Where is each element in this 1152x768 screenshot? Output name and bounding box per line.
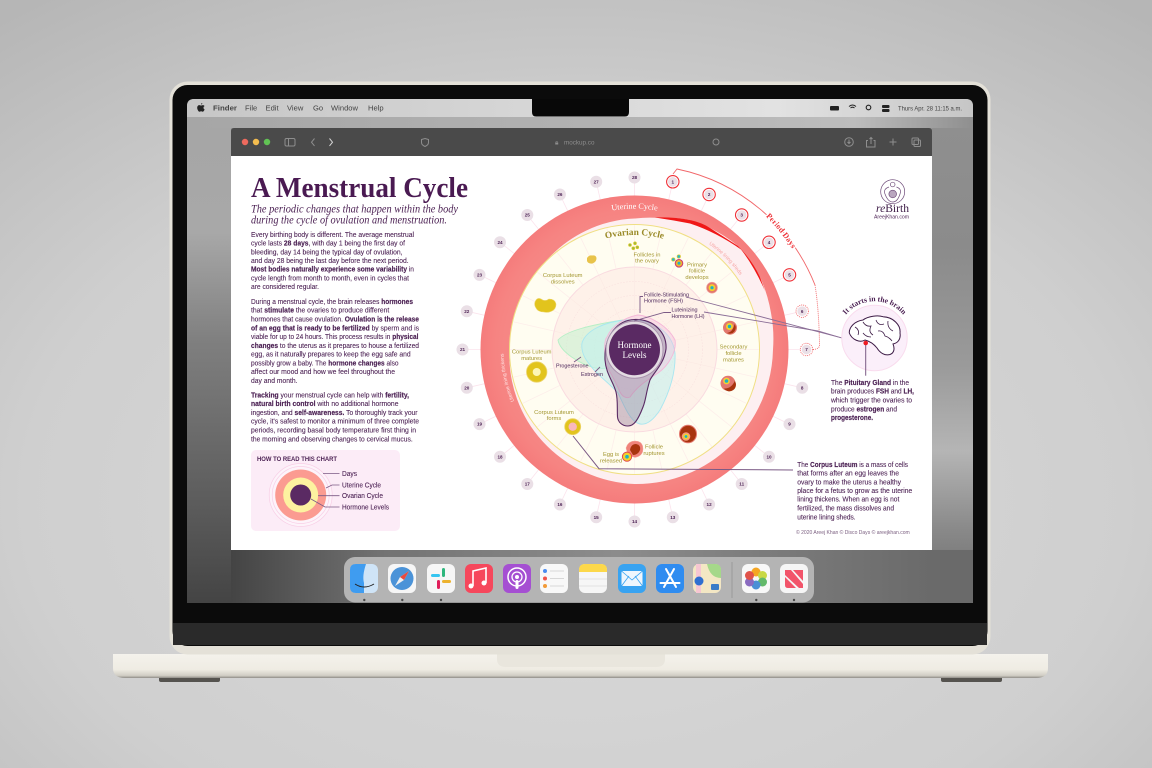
icon: corpus luteum matures: [526, 362, 547, 382]
icon: maturing follicle one: [706, 282, 718, 293]
day markers: 28: [632, 175, 637, 180]
label: estrogen: Estrogen: [581, 372, 603, 378]
menu bar labels: Window: [331, 104, 359, 112]
uterine lining: [509, 218, 773, 484]
menu bar labels: Finder: [213, 104, 237, 112]
text block: hormones and ovulation: possibly grow a baby. The hormone changes also: [251, 358, 398, 367]
title: A Menstrual Cycle: [251, 173, 468, 204]
day markers: 5: [788, 272, 791, 278]
day markers: 7: [805, 347, 808, 352]
browser title bar: [231, 128, 932, 156]
text block: intro: cycle lasts 28 days, with day 1 being the first day of: [251, 239, 406, 248]
dock: [344, 557, 814, 602]
center: hormone levels: [606, 321, 663, 378]
status icons and clock: Thurs Apr. 28 11:15 a.m.: [898, 106, 962, 112]
day markers: 14: [632, 519, 637, 524]
notch: [532, 99, 629, 116]
icon: brain: [849, 316, 900, 355]
text block: pituitary gland: brain produces FSH and LH,: [831, 387, 914, 396]
text block: pituitary gland: [830, 378, 914, 422]
label: FSH: [644, 292, 689, 304]
panel: how to read this chart: HOW TO READ THIS CHART: [257, 456, 337, 463]
text block: corpus luteum: lining thickens. When an egg is not: [797, 495, 900, 504]
status icons and clock: [830, 105, 962, 112]
text block: pituitary gland: which trigger the ovaries to: [830, 395, 912, 404]
corpus luteum leader: [573, 436, 793, 470]
hormone leader lines: [574, 296, 842, 372]
text block: corpus luteum: that forms after an egg leaves the: [797, 469, 899, 478]
label: uterine lining sheds: Uterine lining sheds: [710, 242, 742, 275]
day markers: 10: [766, 454, 772, 459]
hormone curves: [558, 315, 675, 426]
day markers: 21: [460, 347, 465, 352]
day markers: 1: [672, 179, 675, 184]
center: hormone levels: Hormone: [618, 340, 652, 350]
day markers: 3: [740, 213, 743, 218]
text block: tracking: the morning and observing changes to cervical mucus.: [251, 434, 413, 443]
ovarian labels: the ovary: [635, 259, 659, 265]
menu bar labels: Edit: [266, 104, 279, 112]
legend rings: [269, 464, 332, 526]
ovarian labels: Primary: [687, 262, 707, 268]
text block: intro: Every birthing body is different. The average menstrual: [251, 230, 414, 239]
text block: hormones and ovulation: changes to the uterus as it prepares to house a fertilized: [251, 341, 419, 350]
menu bar labels: Help: [368, 104, 384, 112]
menu bar labels: File: [245, 104, 257, 112]
icon: primary follicles: [672, 255, 683, 267]
icon: maturing follicle three: [720, 376, 736, 391]
label: ovarian cycle: Ovarian Cycle: [605, 228, 664, 238]
text block: hormones and ovulation: of an egg that is ready to be fertilized by sperm and is: [251, 323, 419, 332]
label: FSH: Follicle-Stimulating: [644, 292, 689, 298]
panel: it starts in the brain: [841, 296, 908, 376]
subtitle: The periodic changes that happen within the body: [251, 201, 459, 215]
text block: intro: are considered regular.: [251, 282, 319, 291]
day markers: 25: [525, 213, 530, 218]
day markers: 16: [557, 502, 563, 507]
day markers: 6: [801, 309, 804, 314]
day markers: [456, 172, 813, 528]
hormone level grid: [552, 267, 717, 432]
icon: notes: [579, 564, 607, 593]
day markers: 9: [788, 422, 791, 427]
text block: tracking: Tracking your menstrual cycle can help with fertility,: [251, 390, 409, 399]
legend labels: Days: [342, 469, 357, 478]
subtitle: during the cycle of ovulation and menstruation.: [251, 212, 447, 226]
inner spokes: [510, 225, 759, 474]
ovarian labels: released: [600, 458, 622, 464]
legend labels: Uterine Cycle: [342, 480, 381, 489]
ovarian labels: Secondary: [720, 345, 747, 351]
ovarian labels: Corpus Luteum: [534, 410, 574, 416]
day markers: 2: [708, 192, 711, 197]
day markers: 20: [464, 385, 470, 390]
text block: hormones and ovulation: affect our mood and how we feel throughout the: [251, 367, 395, 376]
toolbar icons: [285, 138, 920, 147]
ovarian labels: Follicle: [645, 444, 663, 450]
text block: hormones and ovulation: egg, as it naturally prepares to keep the egg safe and: [251, 350, 411, 359]
pituitary marker: [865, 343, 867, 376]
text block: hormones and ovulation: [251, 297, 419, 385]
logo: reBirth: reBirth: [876, 203, 909, 215]
ovarian labels: dissolves: [551, 279, 575, 285]
address bar: 🔒︎: [555, 140, 559, 146]
outer day spokes: [468, 183, 801, 516]
day markers: 8: [801, 385, 804, 390]
day markers: 22: [464, 309, 470, 314]
text block: tracking: ingestion, and self-awareness. To thoroughly track your: [251, 408, 418, 417]
menu bar labels: View: [287, 104, 304, 112]
icon: slack: [427, 564, 455, 593]
text block: hormones and ovulation: During a menstrual cycle, the brain releases hormones: [251, 297, 413, 306]
text block: hormones and ovulation: day and month.: [251, 376, 298, 385]
ovarian labels: Corpus Luteum: [512, 350, 552, 356]
ovarian labels: develops: [685, 275, 709, 281]
day markers: 15: [594, 515, 599, 520]
day markers: 26: [557, 192, 563, 197]
text block: tracking: periods, recording basal body temperature first thing in: [251, 426, 416, 434]
menu bar labels: [213, 104, 384, 112]
estrogen curve: [582, 320, 675, 424]
text block: intro: Most bodies naturally experience some variability in: [251, 265, 414, 274]
laptop lid: [170, 82, 990, 654]
icon: maturing follicle two: [723, 321, 737, 335]
icon: app store: [656, 564, 684, 593]
icon: corpus luteum dissolves large: [535, 298, 556, 312]
chart: cycle wheel: [468, 183, 801, 516]
icon: released egg: [622, 452, 632, 461]
icon: follicle rupture: [626, 441, 643, 458]
text block: intro: and day 28 being the last day before the next period.: [251, 256, 409, 265]
label: LH: [672, 308, 705, 320]
period days bracket: [672, 168, 820, 350]
icon: news: [780, 564, 808, 593]
text block: tracking: [251, 390, 419, 443]
text block: intro: bleeding, day 14 being the typical day of ovulation,: [251, 247, 402, 256]
text block: pituitary gland: progesterone.: [831, 413, 873, 422]
day markers: 24: [497, 240, 503, 245]
icon: corpus luteum dissolves small: [587, 255, 596, 264]
legend labels: [342, 469, 389, 511]
ovarian labels: follicle: [725, 351, 742, 357]
day markers: 11: [739, 482, 745, 487]
day markers: 18: [497, 454, 503, 459]
ovarian labels: [512, 252, 747, 464]
day markers: 23: [477, 272, 482, 278]
text block: hormones and ovulation: that stimulate the ovaries to produce different: [251, 306, 390, 315]
logo mark: [881, 180, 905, 204]
icon: podcasts: [503, 564, 531, 593]
ovarian labels: follicle: [689, 269, 705, 275]
ovarian cycle disc: [510, 224, 760, 474]
text block: corpus luteum: [797, 460, 912, 521]
progesterone curve: [558, 320, 642, 369]
text block: corpus luteum: fertilized, the mass dissolves and: [797, 504, 894, 513]
ovarian labels: Corpus Luteum: [543, 273, 583, 279]
ovarian labels: Follicles in: [633, 252, 661, 258]
day markers: 17: [525, 482, 530, 487]
logo: reBirth: [874, 180, 909, 220]
label: uterine lining thickens: Uterine lining thickens: [500, 354, 514, 402]
text block: pituitary gland: produce estrogen and: [831, 404, 897, 413]
day markers: 4: [768, 240, 771, 245]
text block: intro: [251, 230, 414, 291]
wallpaper: [187, 99, 973, 603]
ovarian labels: forms: [547, 416, 561, 422]
menu bar labels: Go: [313, 104, 323, 112]
text block: tracking: natural birth control with no additional hormone: [251, 399, 398, 408]
traffic lights: [242, 139, 270, 145]
ovarian labels: Egg is: [603, 452, 619, 458]
text block: pituitary gland: The Pituitary Gland in the: [831, 378, 909, 387]
label: LH: Luteinizing: [672, 308, 698, 314]
ovarian labels: matures: [521, 356, 542, 362]
legend labels: Hormone Levels: [342, 502, 389, 511]
logo: reBirth: AreejKhan.com: [874, 214, 909, 220]
leaders to the brain: [686, 297, 842, 338]
day markers: 19: [477, 422, 482, 427]
legend labels: Ovarian Cycle: [342, 491, 383, 500]
laptop base: [113, 654, 1048, 682]
ovarian labels: matures: [723, 357, 744, 363]
ovarian labels: ruptures: [643, 451, 665, 457]
label: uterine cycle: Uterine Cycle: [611, 203, 658, 211]
text block: hormones and ovulation: viable for up to 24 hours. This process results in physical: [251, 332, 418, 341]
icon: reminders: [540, 564, 568, 593]
text block: tracking: cycle, it's safest to monitor a minimum of three complete: [251, 417, 419, 426]
FSH curve: [605, 315, 675, 398]
icon: follicles in the ovary: [628, 242, 639, 250]
legend leaders: [311, 474, 340, 507]
text block: corpus luteum: uterine lining sheds.: [797, 512, 856, 521]
copyright: © 2020 Areej Khan © Disco Days © areejkhan.com: [796, 529, 910, 536]
text block: corpus luteum: place for a fetus to grow as the uterine: [797, 486, 912, 495]
browser title bar: mockup.co: [564, 140, 595, 146]
heading: it starts in the brain: It starts in the brain: [842, 296, 906, 315]
apple logo: [197, 103, 205, 112]
text block: intro: cycle length from month to month, even in cycles that: [251, 273, 410, 282]
menu bar: [187, 99, 973, 117]
LH curve: [605, 319, 666, 426]
text block: corpus luteum: ovary to make the uterus a healthy: [797, 477, 901, 486]
icon: photos: [742, 564, 770, 593]
subtitle: [251, 201, 459, 226]
icon: mail: [618, 564, 646, 593]
icon: finder: [350, 564, 378, 593]
day markers: 27: [594, 179, 599, 184]
label: period days: Period Days: [766, 212, 796, 248]
day markers: 12: [707, 502, 712, 507]
icon: corpus luteum forms: [565, 419, 581, 435]
uterine cycle band: [480, 196, 788, 504]
day markers: 13: [670, 515, 676, 520]
text block: hormones and ovulation: hormones that cause ovulation. Ovulation is the release: [251, 314, 419, 324]
page background: [231, 156, 932, 550]
center: hormone levels: Levels: [622, 350, 647, 360]
label: progesterone: Progesterone: [556, 364, 588, 370]
shedding lining crescent: [655, 217, 765, 291]
icon: safari: [388, 564, 416, 593]
icon: maps: [693, 564, 721, 593]
dock indicator dots: [363, 599, 795, 601]
label: LH: Hormone (LH): [672, 314, 705, 320]
panel: how to read this chart: [251, 450, 400, 531]
icon: music: [465, 564, 493, 593]
label: FSH: Hormone (FSH): [644, 298, 683, 304]
text block: corpus luteum: The Corpus Luteum is a mass of cells: [797, 460, 908, 469]
icon: maturing follicle four: [680, 425, 696, 443]
